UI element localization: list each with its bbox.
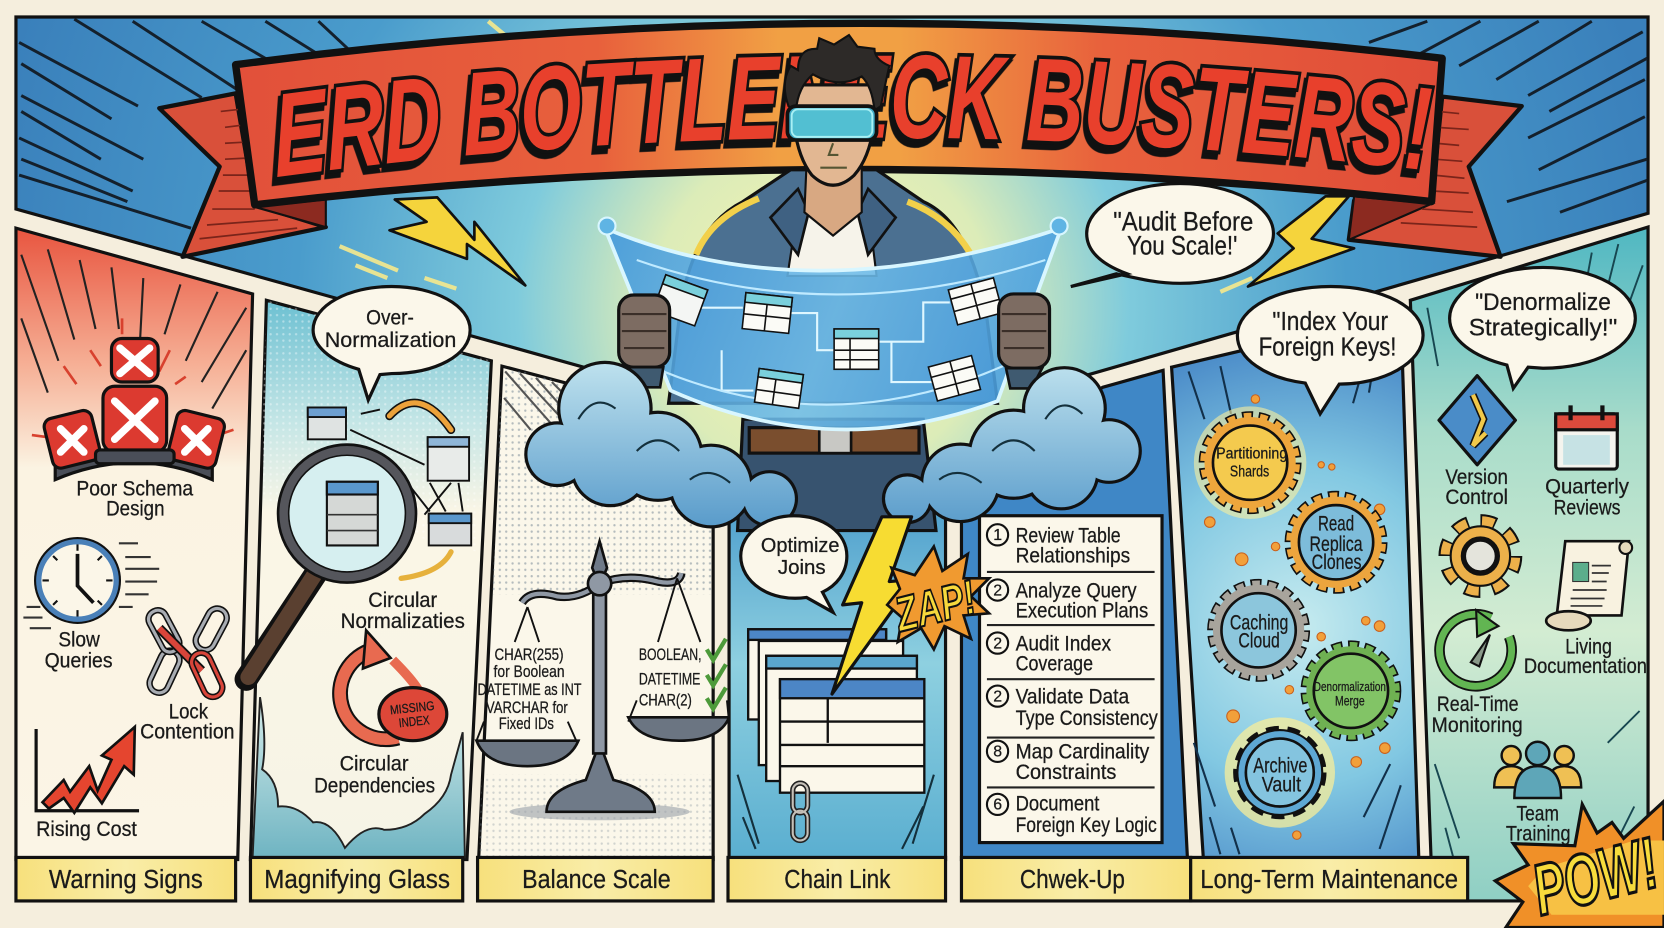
icon: chain — [793, 783, 808, 840]
checklist: 6 — [993, 797, 1002, 814]
icon: scroll document — [1546, 541, 1632, 630]
section labels: Warning Signs — [49, 866, 203, 894]
bubble: denormalize strategically: "Denormalize — [1475, 289, 1611, 316]
section labels: Long-Term Maintenance — [1200, 866, 1458, 894]
bubble: denormalize strategically: Strategically!" — [1469, 314, 1617, 341]
text: rising cost: Rising Cost — [36, 818, 137, 841]
checklist — [980, 516, 1162, 843]
neck and head — [804, 164, 862, 236]
bubble: optimize joins — [741, 516, 847, 612]
panel: chain link — [729, 467, 946, 860]
checklist: Validate Data — [1016, 686, 1129, 709]
cloud: left — [524, 361, 798, 528]
text: quarterly reviews — [1545, 475, 1629, 520]
text: circular dependencies — [314, 752, 435, 798]
icon: left lightning bolt — [389, 197, 525, 285]
text: circular dependencies: Dependencies — [314, 775, 435, 798]
icon: real-time monitoring — [1440, 610, 1512, 686]
icon: warning sirens — [42, 339, 226, 480]
title: ERD BOTTLENECK BUSTERS! — [272, 51, 1436, 186]
checklist: Review Table — [1016, 524, 1121, 547]
icon: left hand — [619, 295, 670, 387]
bubble: audit before you scale: "Audit Before — [1113, 206, 1253, 236]
text: over-normalization bubble: Over- — [366, 307, 414, 330]
text: real-time monitoring — [1432, 693, 1523, 737]
text: slow queries: Queries — [45, 649, 113, 672]
icon: broken chain — [146, 605, 230, 700]
icon: partitioning shards gear: Partitioning — [1216, 445, 1287, 462]
text: right pan items: BOOLEAN, — [639, 646, 701, 664]
right ribbon tail — [1349, 97, 1522, 257]
text: slow queries: Slow — [58, 628, 100, 651]
text: version control: Version — [1445, 466, 1508, 489]
hologram — [599, 218, 1068, 429]
text: right pan items — [639, 639, 726, 710]
panel: check-up — [961, 370, 1187, 860]
icon: denormalization merge gear — [1306, 646, 1395, 735]
text: slow queries — [45, 628, 113, 672]
text: left pan items: CHAR(255) — [495, 646, 564, 664]
panel: warning signs — [16, 228, 253, 860]
text: quarterly reviews: Quarterly — [1545, 475, 1629, 498]
checklist: Document — [1016, 793, 1099, 816]
diagram: small tables — [308, 407, 471, 545]
icon: partitioning shards gear: Shards — [1230, 463, 1269, 480]
icon: partitioning shards gear — [1194, 406, 1306, 519]
left ribbon tail — [159, 93, 326, 257]
text: left pan items — [478, 646, 582, 733]
text: version control: Control — [1445, 486, 1508, 509]
icon: read replica clones gear: Replica — [1310, 533, 1363, 556]
checklist: 1 — [993, 527, 1002, 544]
icon: read replica clones gear: Read — [1318, 513, 1354, 536]
text: lock contention: Lock — [169, 700, 208, 723]
text: poor schema design: Design — [106, 498, 165, 521]
icon: denormalization merge gear: Merge — [1335, 694, 1365, 709]
chart: rising cost arrow — [36, 727, 139, 813]
icon: denormalization merge gear: Denormalization — [1314, 679, 1386, 694]
icon: caching cloud gear: Cloud — [1238, 629, 1280, 652]
icon: circular dependency arrow — [340, 630, 447, 741]
text: over-normalization bubble — [313, 287, 470, 400]
text: left pan items: VARCHAR for — [486, 699, 568, 717]
text: left pan items: for Boolean — [493, 663, 565, 681]
panel: sky header — [16, 17, 1648, 552]
bubble: audit before you scale: You Scale!' — [1127, 231, 1237, 261]
icon: clock — [23, 538, 159, 628]
text: real-time monitoring: Monitoring — [1432, 714, 1523, 737]
text: lock contention — [140, 700, 235, 744]
text: circular normalizaties: Normalizaties — [341, 610, 465, 633]
checklist: Execution Plans — [1016, 600, 1148, 623]
cloud: right — [882, 366, 1142, 524]
bubble: optimize joins: Joins — [778, 557, 826, 579]
text: circular normalizaties: Circular — [368, 589, 437, 612]
text: right pan items: CHAR(2) — [639, 692, 692, 710]
cloud border — [253, 697, 465, 857]
text: poor schema design: Poor Schema — [76, 478, 193, 501]
bubble: index your foreign keys: Foreign Keys! — [1259, 333, 1397, 361]
checklist: 8 — [993, 744, 1002, 761]
main ribbon — [236, 23, 1442, 205]
section labels: Chwek-Up — [1020, 866, 1125, 894]
text: team training: Team — [1516, 802, 1559, 825]
icon: zap burst: ZAP! — [888, 571, 981, 643]
banner — [157, 20, 1524, 259]
icon: right lightning bolt — [1248, 196, 1354, 287]
text: living documentation: Documentation — [1524, 655, 1647, 678]
icon: archive vault gear: Vault — [1262, 774, 1301, 797]
bubble: index your foreign keys: "Index Your — [1272, 308, 1389, 336]
section labels: Magnifying Glass — [264, 866, 450, 894]
text: living documentation — [1524, 636, 1647, 678]
text: version control — [1445, 466, 1508, 509]
icon: archive vault gear: Archive — [1253, 755, 1307, 778]
checklist: Coverage — [1016, 653, 1093, 676]
checklist: Foreign Key Logic — [1016, 814, 1157, 837]
checklist: Audit Index — [1016, 633, 1111, 656]
icon: scale — [477, 541, 729, 820]
icon: magnifier — [246, 445, 416, 679]
pants and belt — [738, 419, 936, 531]
text: circular normalizaties — [341, 589, 465, 633]
text: poor schema design — [76, 478, 193, 521]
panel: long-term maintenance — [1172, 313, 1419, 860]
text: team training — [1506, 802, 1571, 845]
bubble: index your foreign keys — [1237, 287, 1423, 414]
section labels: Balance Scale — [522, 866, 671, 894]
bubble: audit before you scale — [1071, 184, 1273, 287]
checklist: Constraints — [1016, 761, 1116, 784]
icon: stacked tables — [748, 629, 924, 793]
icon: version control — [1439, 376, 1515, 465]
icon: archive vault gear — [1225, 717, 1335, 828]
icon: calendar — [1556, 405, 1617, 469]
panel: balance scale — [477, 366, 729, 860]
text: real-time monitoring: Real-Time — [1437, 693, 1519, 716]
icon: read replica clones gear — [1290, 497, 1382, 588]
icon: right hand — [999, 294, 1050, 388]
schema tables — [653, 275, 1003, 408]
icon: read replica clones gear: Clones — [1312, 551, 1362, 574]
icon: caching cloud gear: Caching — [1230, 611, 1288, 634]
icon: zap burst — [887, 547, 989, 649]
text: lock contention: Contention — [140, 721, 235, 744]
text: living documentation: Living — [1565, 636, 1612, 659]
icon: goggles — [787, 106, 877, 140]
text: circular dependencies: Circular — [340, 752, 409, 775]
section labels — [16, 857, 1468, 901]
hero figure — [599, 35, 1068, 531]
sparks — [1204, 395, 1390, 839]
checklist: Type Consistency — [1016, 707, 1158, 730]
checklist: 2 — [993, 635, 1002, 652]
text: team training: Training — [1506, 822, 1571, 845]
icon: team — [1494, 742, 1581, 798]
checklist: Relationships — [1016, 544, 1130, 567]
icon: orange arrows — [389, 403, 451, 578]
icon: center lightning bolt — [832, 517, 915, 694]
bubble: denormalize strategically — [1450, 267, 1635, 388]
section labels: Chain Link — [784, 866, 891, 894]
icon: circular dependency arrow: MISSING — [389, 698, 435, 717]
icon: gear — [1446, 522, 1514, 590]
panel: team habits — [1410, 227, 1648, 901]
text: quarterly reviews: Reviews — [1554, 497, 1620, 520]
checklist: 2 — [993, 688, 1002, 705]
checklist: Map Cardinality — [1016, 741, 1150, 764]
icon: caching cloud gear — [1213, 585, 1304, 676]
text: right pan items: DATETIME — [639, 670, 700, 688]
panel: magnifying glass — [246, 287, 491, 860]
text: over-normalization bubble: Normalization — [325, 329, 456, 352]
text: left pan items: DATETIME as INT — [478, 681, 582, 699]
icon: circular dependency arrow: INDEX — [398, 712, 431, 730]
checklist: 2 — [993, 582, 1002, 599]
jacket — [669, 170, 998, 403]
text: left pan items: Fixed IDs — [499, 715, 554, 733]
bubble: optimize joins: Optimize — [761, 535, 839, 557]
checklist: Analyze Query — [1016, 579, 1137, 602]
